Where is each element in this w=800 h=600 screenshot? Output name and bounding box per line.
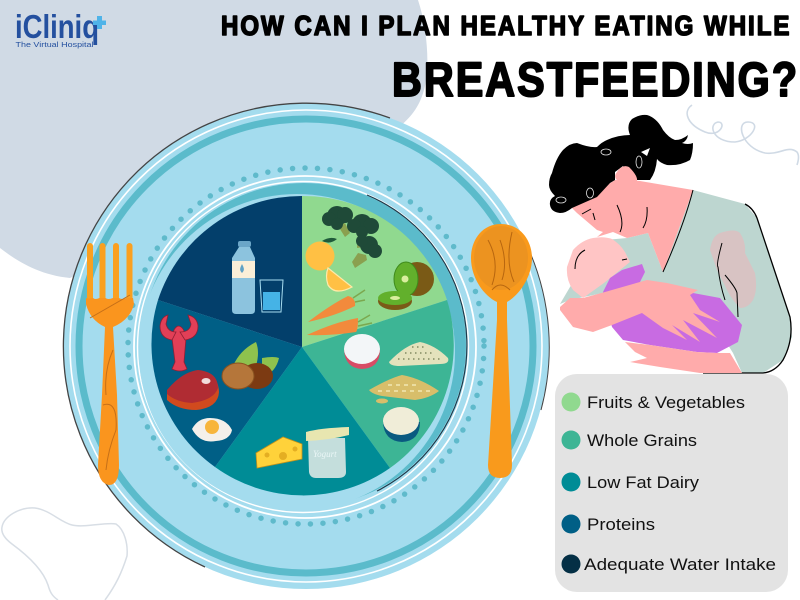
icon: grain pile bbox=[389, 342, 448, 366]
icon: broccoli bbox=[322, 206, 382, 268]
title line 2: BREASTFEEDING? bbox=[392, 53, 797, 107]
logo: iCliniq bbox=[15, 8, 99, 45]
hair bbox=[549, 115, 693, 213]
icon: glass of water bbox=[260, 280, 283, 312]
icon: orange slice bbox=[326, 268, 352, 291]
mother's face and neck bbox=[572, 180, 693, 272]
title line 1: HOW CAN I PLAN HEALTHY EATING WHILE bbox=[221, 9, 789, 41]
segment: proteins bbox=[151, 300, 302, 467]
legend item: proteins: Proteins bbox=[587, 516, 655, 534]
mother's lower body bbox=[625, 342, 742, 373]
mother's arm and hand bbox=[560, 280, 720, 342]
legend panel bbox=[555, 374, 788, 592]
segment: low fat dairy bbox=[215, 347, 390, 495]
icon: spoon bbox=[471, 224, 532, 478]
icon: rice bowl bbox=[344, 334, 380, 369]
legend item: adequate water intake: Adequate Water Intake bbox=[584, 556, 776, 574]
icon: yogurt cup: Yogurt bbox=[313, 449, 337, 459]
icon: walnuts and leaves bbox=[222, 342, 279, 389]
mother's ear bbox=[615, 166, 637, 182]
icon: fork bbox=[86, 243, 134, 485]
hair gap bbox=[641, 148, 650, 156]
title bbox=[221, 9, 797, 107]
squiggle top-right bbox=[687, 105, 799, 165]
legend item: low fat dairy: Low Fat Dairy bbox=[587, 474, 700, 492]
baby head bbox=[567, 237, 630, 298]
baby blanket bbox=[603, 264, 742, 353]
outline squiggle bottom-left bbox=[2, 508, 127, 600]
segment: whole grains bbox=[302, 300, 454, 468]
icon: cheese bbox=[256, 437, 302, 468]
legend item: fruits and vegetables: Fruits & Vegetables bbox=[587, 394, 745, 412]
icon: steak bbox=[167, 370, 219, 410]
icon: egg bbox=[192, 418, 232, 442]
legend item: whole grains: Whole Grains bbox=[587, 432, 697, 450]
icon: lobster bbox=[160, 315, 198, 371]
icon: bowl of oats bbox=[383, 407, 420, 442]
segment: water bbox=[158, 196, 302, 347]
legend item: proteins bbox=[562, 514, 655, 534]
icon: yogurt cup bbox=[306, 427, 349, 478]
segment: fruits and vegetables bbox=[302, 196, 447, 347]
icon: oats pile bbox=[369, 375, 439, 404]
legend item: whole grains bbox=[562, 430, 697, 450]
hair highlights bbox=[556, 149, 642, 203]
icon: orange bbox=[306, 238, 337, 270]
mother's top bbox=[560, 190, 792, 373]
background blob bbox=[0, 0, 427, 278]
illustration: mother nursing baby bbox=[549, 115, 792, 373]
pie chart bbox=[151, 196, 454, 495]
arm shadow bbox=[710, 230, 756, 308]
logo: The Virtual Hospital bbox=[16, 40, 94, 49]
icon: water bottle bbox=[232, 241, 255, 314]
icon: kiwi bbox=[378, 262, 434, 310]
icon: carrots bbox=[307, 290, 372, 335]
plate bbox=[63, 103, 549, 589]
legend item: low fat dairy bbox=[562, 472, 700, 492]
